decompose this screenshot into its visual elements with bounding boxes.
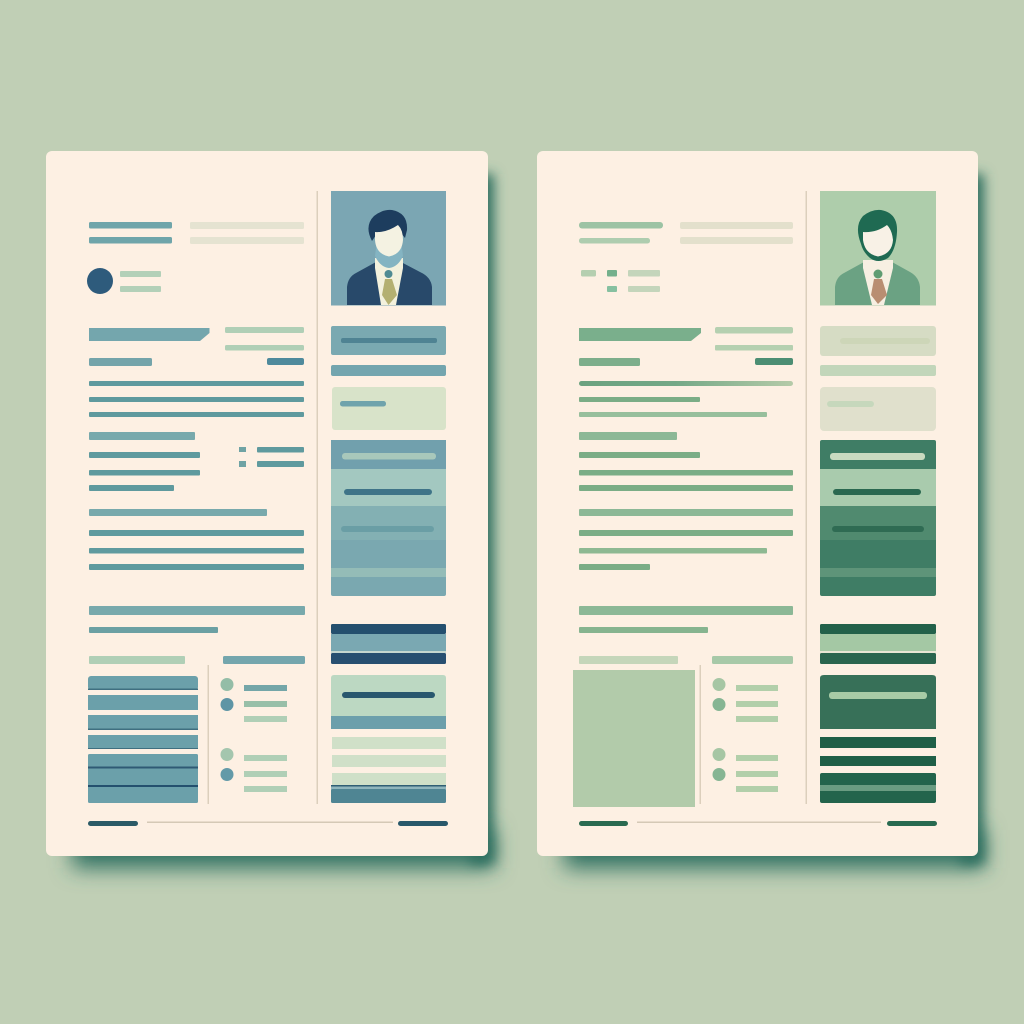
- card background: [46, 151, 488, 856]
- striped table: [88, 676, 198, 803]
- panel: left resume: [46, 151, 488, 856]
- contact chips: [581, 270, 660, 292]
- image placeholder: [573, 670, 695, 807]
- skill dots: [220, 678, 234, 781]
- section heading tab: [89, 328, 210, 341]
- skill lines: [244, 685, 287, 792]
- title lines: [190, 222, 304, 244]
- paragraph lines: [579, 381, 793, 633]
- skill dots: [712, 678, 726, 781]
- sidebar stripes top: [820, 624, 936, 664]
- sidebar boxes: [331, 326, 446, 430]
- lower headings: [89, 656, 305, 664]
- section heading tab: [579, 328, 701, 341]
- sidebar stripes top: [331, 624, 446, 664]
- subheading: [89, 358, 152, 366]
- subheading: [579, 358, 640, 366]
- panel: right resume: [537, 151, 978, 856]
- column dividers: [700, 191, 807, 804]
- footer: [579, 821, 937, 826]
- panel: right card shadow: [564, 174, 984, 868]
- card background: [537, 151, 978, 856]
- panel: left card shadow: [72, 174, 494, 868]
- lower headings: [579, 656, 793, 664]
- icon: contact circle: [87, 268, 113, 294]
- contact lines: [120, 271, 161, 292]
- sidebar card and stripes: [820, 675, 936, 803]
- skill lines: [736, 685, 778, 792]
- date tag: [267, 358, 304, 365]
- date tag: [755, 358, 793, 365]
- title lines: [680, 222, 793, 244]
- sidebar stacked block: [820, 440, 936, 596]
- side lines: [715, 327, 793, 350]
- name heading lines: [89, 222, 172, 244]
- sidebar card and stripes: [331, 675, 446, 803]
- photo: portrait: [820, 191, 936, 306]
- column dividers: [208, 191, 318, 804]
- sidebar stacked block: [331, 440, 446, 596]
- paragraph lines: [89, 381, 305, 633]
- name heading lines: [579, 222, 663, 244]
- photo: portrait: [331, 191, 446, 306]
- side lines: [225, 327, 304, 350]
- footer: [88, 821, 448, 826]
- sidebar boxes: [820, 326, 936, 431]
